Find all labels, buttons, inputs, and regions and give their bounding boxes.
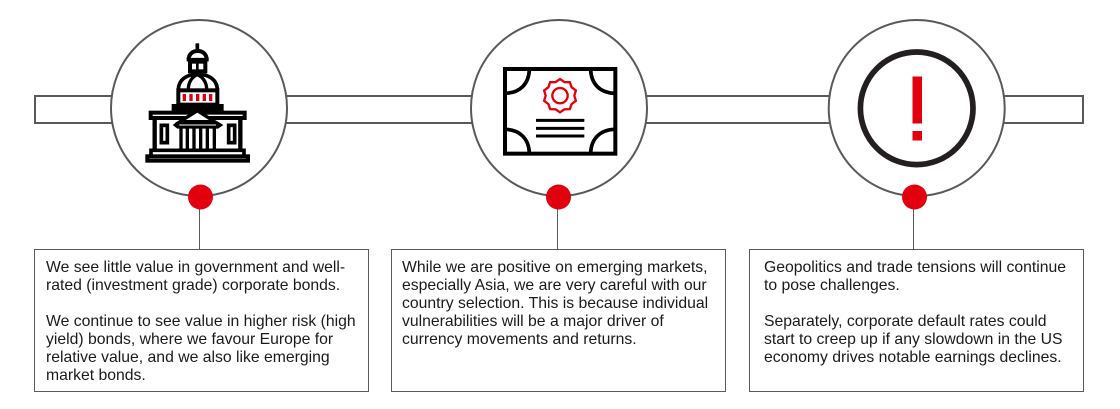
text box 2: While we are positive on emerging markets,: [402, 259, 708, 276]
red dot 3: [902, 184, 927, 210]
panel: government and corporate bonds: [34, 20, 368, 392]
timeline band: [35, 96, 1083, 123]
text box 1: We see little value in government and well-: [46, 259, 345, 276]
text box 2: country selection. This is because individual: [402, 295, 708, 312]
text box 1: rated (investment grade) corporate bonds.: [46, 277, 340, 294]
red dot 2: [546, 184, 571, 210]
connector stem 2: [556, 205, 558, 250]
text box 1: [34, 250, 368, 392]
red dot 1: [188, 184, 213, 210]
text box 2: currency movements and returns.: [402, 331, 637, 348]
icon: certificate: [505, 69, 615, 154]
text box 2: [392, 250, 726, 392]
text box 1: yield) bonds, where we favour Europe for: [46, 331, 333, 348]
text box 1: market bonds.: [46, 367, 146, 384]
text box 1: relative value, and we also like emerging: [46, 349, 330, 366]
icon circle 1: [111, 20, 287, 196]
text box 1: We continue to see value in higher risk (high: [46, 313, 356, 330]
icon: government building: [147, 43, 248, 161]
text box 3: Separately, corporate default rates could: [764, 313, 1047, 330]
icon circle 2: [471, 20, 647, 196]
connector stem 1: [198, 205, 200, 250]
text box 2: vulnerabilities will be a major driver of: [402, 313, 664, 330]
text box 3: to pose challenges.: [764, 277, 900, 294]
icon: exclamation warning: [860, 52, 973, 165]
text box 3: Geopolitics and trade tensions will continue: [764, 259, 1066, 276]
panel: geopolitics and default risk: [750, 20, 1084, 392]
text box 3: economy drives notable earnings declines.: [764, 349, 1062, 366]
panel: emerging markets: [392, 20, 726, 392]
text box 3: [750, 250, 1084, 392]
icon circle 3: [829, 20, 1005, 196]
text box 3: start to creep up if any slowdown in the US: [764, 331, 1063, 348]
text box 2: especially Asia, we are very careful with our: [402, 277, 707, 294]
connector stem 3: [912, 205, 914, 250]
